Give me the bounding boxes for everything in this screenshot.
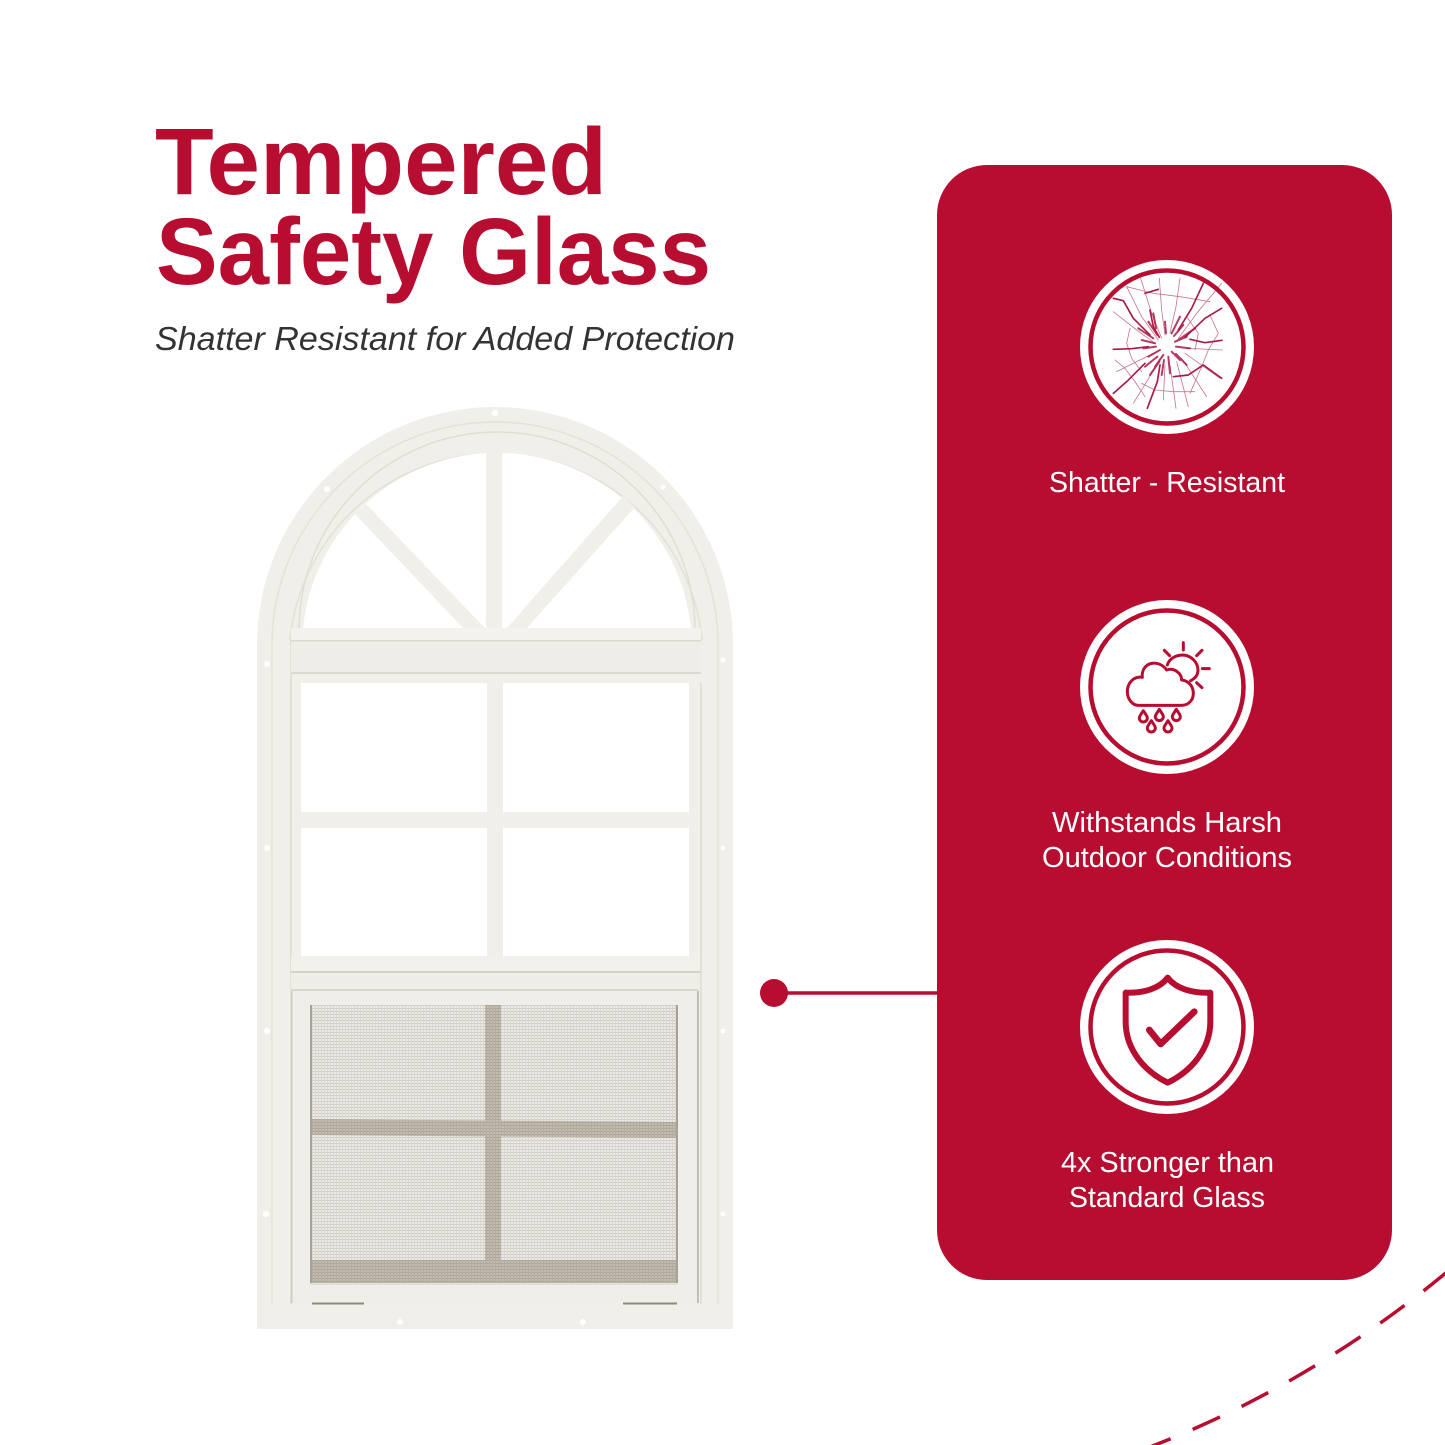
label: harsh conditions: Outdoor Conditions [1042,842,1292,874]
icon: cloud, sun and rain [1080,600,1254,774]
icon: shield with check [1080,940,1254,1114]
decorative dashed curve [1150,1272,1445,1445]
label: harsh conditions: Withstands Harsh [1052,807,1282,839]
subtitle: Shatter Resistant for Added Protection [155,320,735,357]
upper glass panes [301,683,689,956]
screen sash [291,991,699,1303]
mounting holes [263,410,726,1325]
label: stronger than standard glass: Standard Glass [1069,1182,1265,1214]
label: stronger than standard glass: 4x Stronger than [1061,1147,1274,1179]
title [155,109,711,305]
arched glass opening [303,453,691,628]
title: Tempered [155,109,607,215]
label: harsh conditions [1042,807,1292,874]
connector line with dot [760,979,938,1007]
panel: features [937,165,1392,1280]
lower rails [291,956,700,991]
window illustration [257,407,733,1329]
middle rail [291,628,701,674]
label: stronger than standard glass [1061,1147,1274,1214]
sill [257,1302,733,1329]
icon: shattered glass [1080,260,1254,434]
title: Safety Glass [156,199,711,305]
sunburst muntins [355,449,635,629]
label: shatter resistant: Shatter - Resistant [1049,467,1285,499]
insect screen [310,1005,678,1283]
